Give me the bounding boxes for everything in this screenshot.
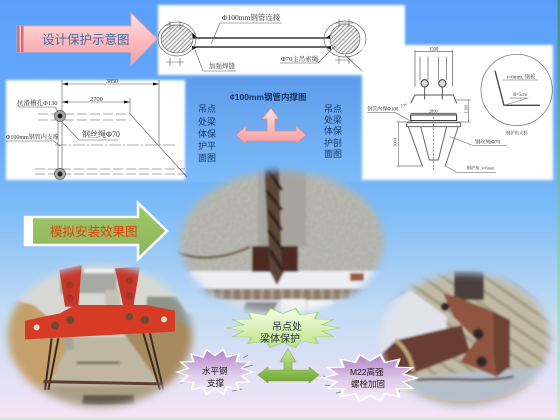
callout: M22 high-strength bolts: 螺栓加固 bbox=[351, 379, 385, 389]
callout: M22 high-strength bolts: M22高强 bbox=[350, 367, 384, 377]
panel: top pipe connection drawing: Φ70主吊索绳 bbox=[281, 54, 319, 63]
panel: cross-section drawing: t=6mm, 钢板 bbox=[507, 72, 536, 80]
panel: cross-section drawing: 17° bbox=[401, 104, 407, 109]
panel: cross-section drawing: 钢护角大样 bbox=[506, 129, 528, 136]
text: plan view label: 面图 bbox=[198, 153, 216, 163]
panel: cross-section drawing bbox=[362, 45, 553, 180]
panel: plan view drawing: 2700 bbox=[90, 96, 103, 103]
panel: cross-section drawing: 2800 bbox=[429, 109, 438, 114]
callout: horizontal steel brace: 水平钢 bbox=[202, 366, 228, 376]
text: section view label: 体保 bbox=[324, 125, 342, 136]
text: section view label: 吊点 bbox=[324, 104, 342, 114]
photo: M22 bolted steel brace bbox=[373, 267, 560, 413]
arrow: pink three-way bbox=[236, 108, 306, 144]
text: section view label: 处梁 bbox=[324, 114, 342, 125]
panel: cross-section drawing: 3000 bbox=[393, 138, 398, 147]
panel: cross-section drawing: 钢丝绳Φ70 bbox=[475, 137, 501, 145]
panel: plan view drawing: 抗滑槽孔Φ130 bbox=[17, 98, 58, 107]
panel: cross-section drawing: 1300 bbox=[463, 105, 468, 113]
callout: horizontal steel brace bbox=[177, 350, 253, 394]
callout: lifting point protection: 梁体保护 bbox=[260, 332, 300, 345]
callout: lifting point protection bbox=[227, 308, 339, 348]
callout: M22 high-strength bolts bbox=[323, 355, 417, 401]
panel: cross-section drawing: R=5cm bbox=[513, 93, 527, 98]
panel: plan view drawing: 钢丝绳Φ70 bbox=[82, 129, 120, 139]
panel: top pipe connection drawing: 加强焊缝 bbox=[209, 61, 236, 70]
panel: plan view drawing bbox=[6, 79, 187, 180]
arrow: design schematic heading: 设计保护示意图 bbox=[42, 32, 130, 47]
panel: top pipe connection drawing: M22高强螺栓 bbox=[364, 66, 397, 74]
photo: red steel support bbox=[0, 257, 200, 417]
text: plan view label: 护平 bbox=[198, 140, 216, 151]
panel: plan view drawing: Φ100mm钢管内支撑 bbox=[6, 133, 59, 141]
arrow: simulated installation heading bbox=[25, 203, 167, 259]
panel: cross-section drawing: 钢护角, t=6mm bbox=[467, 165, 495, 172]
panel: top pipe connection drawing bbox=[158, 5, 405, 75]
panel: top pipe connection drawing: Φ100mm钢管连接 bbox=[222, 12, 281, 22]
text: plan view label: 处梁 bbox=[198, 116, 216, 127]
callout: horizontal steel brace: 支撑 bbox=[207, 378, 225, 388]
text: section view label: 护剖 bbox=[324, 137, 342, 148]
photo: girder lifting point bbox=[170, 165, 394, 322]
arrow: design schematic heading bbox=[17, 13, 157, 65]
panel: cross-section drawing: 1500 bbox=[429, 47, 439, 52]
text: section view label: 面图 bbox=[324, 149, 342, 159]
panel: plan view drawing: 3850 bbox=[106, 79, 118, 85]
arrow: green three-way bbox=[258, 349, 319, 383]
text: plan view label: 吊点 bbox=[198, 104, 216, 114]
text: plan view label: 体保 bbox=[198, 128, 216, 139]
panel: central blue panel bbox=[187, 78, 363, 182]
arrow: simulated installation heading: 模拟安装效果图 bbox=[50, 224, 138, 239]
panel: cross-section drawing: 钢管内撑Φ100 bbox=[367, 105, 399, 112]
heading: pipe brace label: ¢100mm钢管内撑图 bbox=[230, 92, 307, 102]
callout: lifting point protection: 吊点处 bbox=[272, 321, 302, 333]
